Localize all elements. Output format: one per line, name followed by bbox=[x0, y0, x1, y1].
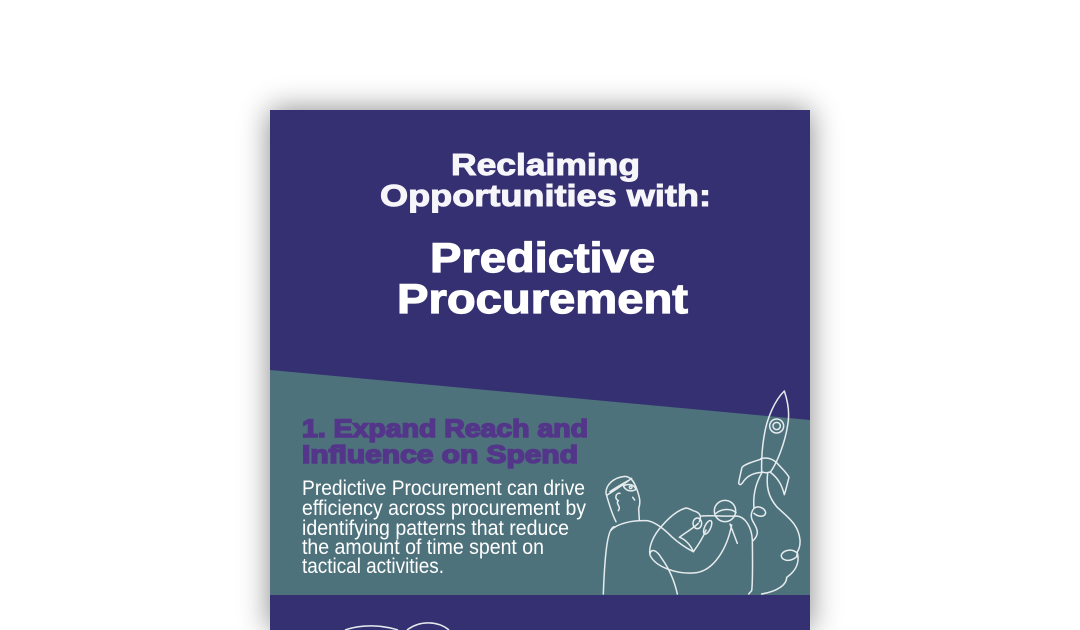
body text: the amount of time spent on bbox=[302, 536, 544, 559]
title: Reclaiming Opportunities with: Reclaiming bbox=[451, 147, 640, 182]
navy background bbox=[270, 110, 810, 630]
title: Reclaiming Opportunities with: Opportunities with: bbox=[380, 178, 711, 213]
title: Predictive Procurement: Predictive bbox=[430, 234, 655, 281]
person bbox=[603, 476, 753, 594]
heading: Expand Reach and Influence on Spend bbox=[302, 415, 588, 469]
heading: Expand Reach and Influence on Spend: 1. Expand Reach and bbox=[302, 415, 588, 443]
panel shadow bbox=[270, 110, 810, 630]
title: Reclaiming Opportunities with bbox=[380, 147, 711, 213]
illustration: person launching rocket bbox=[603, 391, 800, 594]
body text bbox=[302, 477, 586, 578]
body text: Predictive Procurement can drive bbox=[302, 477, 585, 500]
panel: section 1 teal band bbox=[270, 370, 810, 595]
heading: Expand Reach and Influence on Spend: Influence on Spend bbox=[302, 441, 578, 469]
next section illustration arcs bbox=[345, 623, 449, 630]
body text: tactical activities. bbox=[302, 555, 444, 578]
rocket smoke trail bbox=[751, 473, 762, 541]
body text: identifying patterns that reduce bbox=[302, 517, 569, 540]
title: Predictive Procurement: Procurement bbox=[397, 275, 688, 322]
body text: efficiency across procurement by bbox=[302, 497, 586, 520]
title: Predictive Procurement bbox=[397, 234, 688, 322]
icon: rocket bbox=[739, 391, 789, 495]
